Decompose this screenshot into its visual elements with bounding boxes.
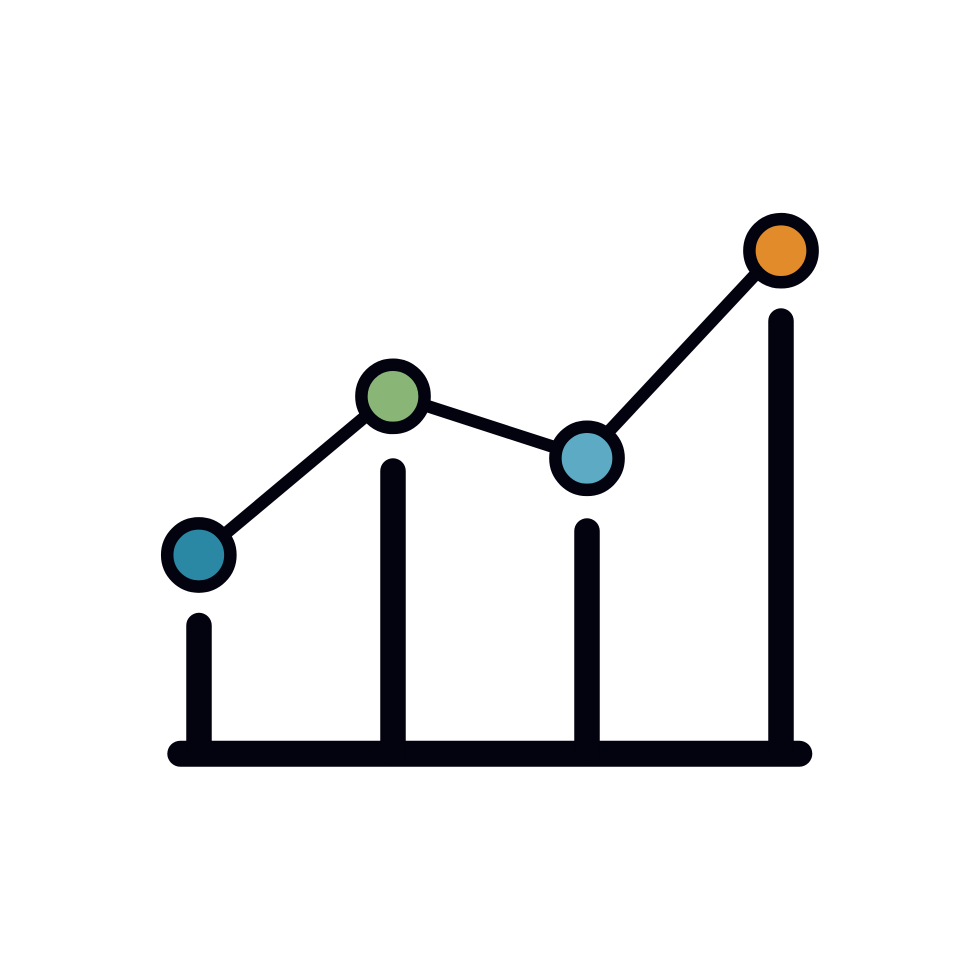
trend line segments (222, 270, 760, 536)
data points (167, 219, 813, 587)
segment 2 (420, 404, 560, 449)
baseline axis (180, 741, 799, 767)
point 4: orange (749, 219, 813, 282)
point 1: teal (167, 523, 230, 587)
bars (199, 321, 781, 753)
point 3: light blue (555, 427, 619, 490)
segment 3 (605, 270, 760, 436)
bar 2 (380, 471, 406, 753)
bar 1 (186, 626, 212, 753)
bar 3 (574, 531, 600, 753)
segment 1 (222, 413, 370, 536)
point 2: green (361, 365, 425, 428)
bar 4 (768, 321, 794, 753)
